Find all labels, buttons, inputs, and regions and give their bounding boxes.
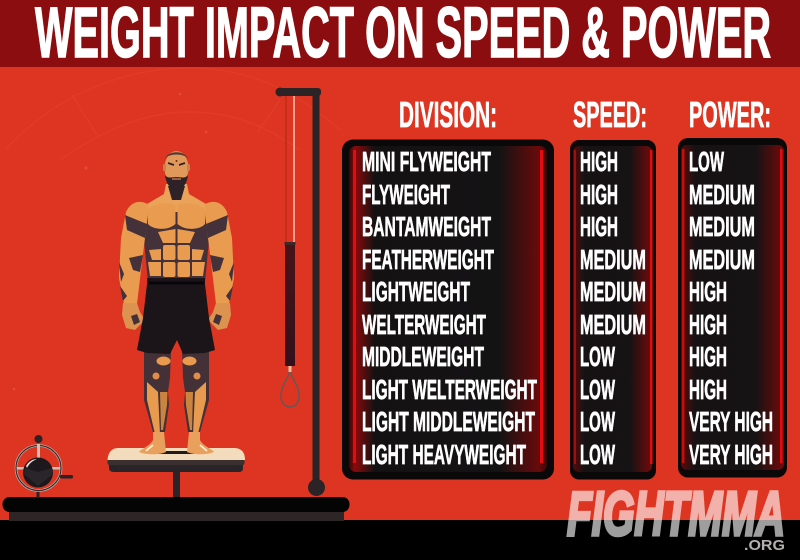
power list: LOW <box>689 146 724 177</box>
speed list: LOW <box>580 341 615 372</box>
panel: division <box>342 140 554 480</box>
gallows pole with hanging rope <box>276 88 325 496</box>
power list: HIGH <box>689 309 727 340</box>
speed list: MEDIUM <box>580 309 646 340</box>
speed list: HIGH <box>580 146 618 177</box>
division list: LIGHTWEIGHT <box>362 276 470 307</box>
division list: LIGHT WELTERWEIGHT <box>362 374 537 405</box>
speed list: LOW <box>580 374 615 405</box>
header: speed: SPEED: <box>573 94 647 135</box>
left arm <box>119 202 148 304</box>
panel: speed <box>570 140 656 480</box>
power list: MEDIUM <box>689 244 755 275</box>
right arm <box>205 202 234 304</box>
power list: HIGH <box>689 276 727 307</box>
division list: MIDDLEWEIGHT <box>362 341 484 372</box>
header: division: DIVISION: <box>399 94 497 135</box>
power list: MEDIUM <box>689 211 755 242</box>
power list: HIGH <box>689 374 727 405</box>
logo: .ORG <box>744 537 785 554</box>
power list: HIGH <box>689 341 727 372</box>
power list: MEDIUM <box>689 179 755 210</box>
bench stand <box>108 448 245 497</box>
speed list: MEDIUM <box>580 276 646 307</box>
torso <box>144 205 209 282</box>
division list <box>362 146 537 470</box>
left leg <box>139 350 171 454</box>
hands <box>122 303 145 330</box>
division list: FLYWEIGHT <box>362 179 450 210</box>
speed list: HIGH <box>580 179 618 210</box>
bottom black band <box>0 520 800 560</box>
fighter figure <box>119 151 234 454</box>
right leg <box>182 350 214 454</box>
trapezius and neck <box>138 184 215 212</box>
head <box>163 151 190 200</box>
arm shadows <box>119 215 234 301</box>
speed list <box>580 146 646 470</box>
icon: scale weight dial <box>16 435 73 498</box>
speed list: LOW <box>580 439 615 470</box>
speed list: HIGH <box>580 211 618 242</box>
header banner <box>0 0 800 67</box>
panel: power <box>678 138 787 478</box>
division list: LIGHT HEAVYWEIGHT <box>362 439 526 470</box>
division list: BANTAMWEIGHT <box>362 211 491 242</box>
division list: LIGHT MIDDLEWEIGHT <box>362 406 535 437</box>
floor platform <box>2 497 350 521</box>
division list: WELTERWEIGHT <box>362 309 486 340</box>
division list: MINI FLYWEIGHT <box>362 146 491 177</box>
speed list: MEDIUM <box>580 244 646 275</box>
power list <box>689 146 773 470</box>
decorative background arcs <box>5 68 340 390</box>
speed list: LOW <box>580 406 615 437</box>
shorts <box>137 278 215 354</box>
chest and abdominal muscles <box>147 203 206 277</box>
division list: FEATHERWEIGHT <box>362 244 494 275</box>
